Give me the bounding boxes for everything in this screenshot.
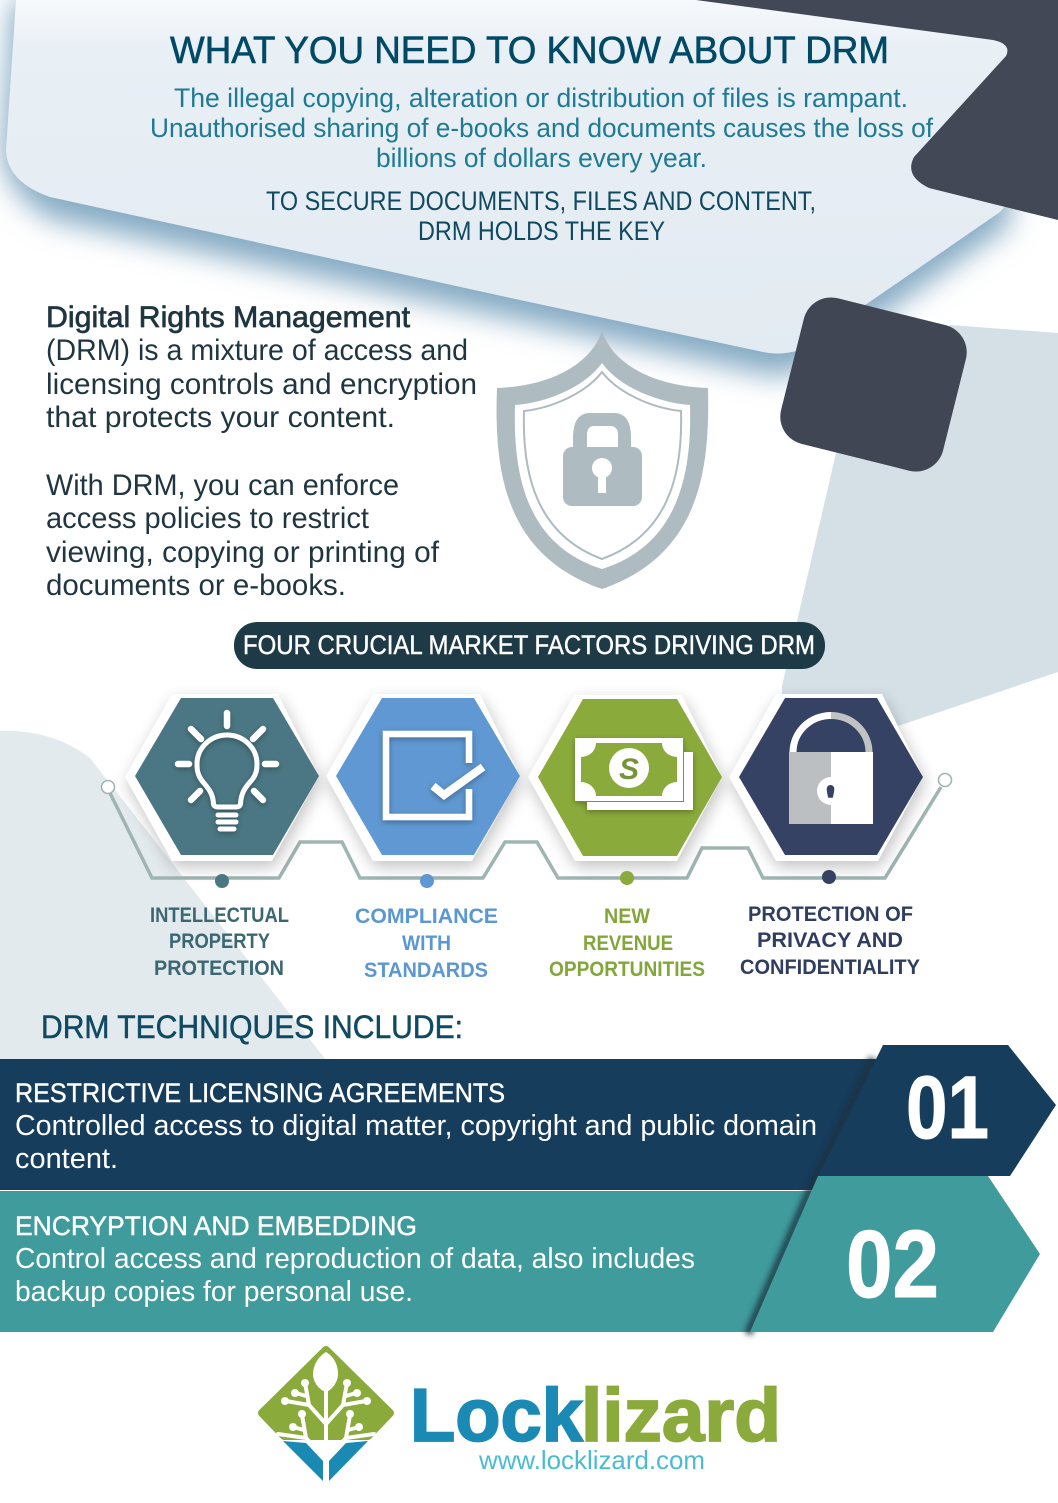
intro text: [150, 83, 933, 173]
logo mark: [262, 1350, 390, 1481]
technique 02 text: Control access and reproduction of data, also includes: [15, 1243, 695, 1275]
DRM definition text: viewing, copying or printing of: [46, 536, 440, 569]
header panel shadow: [2, 0, 1010, 376]
dot: [420, 874, 434, 888]
techniques heading: DRM TECHNIQUES INCLUDE:: [41, 1009, 463, 1045]
label: [355, 905, 498, 982]
header panel: [6, 0, 1058, 354]
technique 02 text: backup copies for personal use.: [15, 1276, 413, 1308]
dark corner shape: [696, 0, 1058, 220]
background shape: right pale panel: [782, 325, 1058, 765]
label: CONFIDENTIALITY: [740, 956, 920, 979]
key statement: DRM HOLDS THE KEY: [418, 216, 665, 246]
fold shadow: [748, 1058, 873, 1334]
technique 01 text: Controlled access to digital matter, copyright and public domain: [15, 1110, 817, 1142]
technique 01 text: [15, 1078, 817, 1175]
icon: banknotes: S: [619, 753, 639, 786]
technique 01 band: [0, 1059, 885, 1190]
factor 2: compliance: [326, 694, 522, 982]
key statement: [266, 186, 816, 246]
DRM definition text: Digital Rights Management: [46, 301, 411, 334]
DRM definition text: documents or e-books.: [46, 569, 346, 602]
factor 3: new revenue: [528, 695, 724, 981]
icon: shield with padlock: [497, 331, 708, 589]
arrow 01: 01: [906, 1057, 989, 1157]
intro text: billions of dollars every year.: [376, 143, 707, 173]
label: STANDARDS: [364, 959, 488, 982]
factors pill heading: FOUR CRUCIAL MARKET FACTORS DRIVING DRM: [243, 630, 815, 660]
label: WITH: [402, 932, 451, 955]
label: PROTECTION OF: [748, 903, 913, 926]
technique 02 text: [15, 1211, 695, 1308]
intro text: Unauthorised sharing of e-books and documents causes the loss of: [150, 113, 933, 143]
DRM definition text: access policies to restrict: [46, 502, 370, 535]
DRM definition text: that protects your content.: [46, 401, 395, 434]
arrow 01: [818, 1045, 1056, 1176]
intro text: The illegal copying, alteration or distribution of files is rampant.: [174, 83, 908, 113]
DRM definition text: With DRM, you can enforce: [46, 469, 399, 502]
icon: checkbox: [386, 734, 483, 817]
factor 4: privacy: [729, 694, 925, 979]
label: COMPLIANCE: [355, 905, 498, 928]
DRM definition text: licensing controls and encryption: [46, 368, 477, 401]
dark rotated square: [774, 292, 973, 477]
logo url: www.locklizard.com: [478, 1445, 705, 1475]
DRM definition text: [46, 301, 477, 602]
technique 01 text: content.: [15, 1143, 118, 1175]
factor 1: intellectual property: [125, 694, 321, 980]
technique 02 band: [0, 1191, 815, 1332]
label: PROPERTY: [169, 930, 270, 953]
label: [549, 905, 705, 981]
label: PRIVACY AND: [757, 929, 903, 952]
dot: [822, 870, 836, 884]
label: INTELLECTUAL: [150, 904, 289, 927]
arrow 02: [750, 1176, 1040, 1332]
logo: [262, 1350, 781, 1481]
technique 01 text: RESTRICTIVE LICENSING AGREEMENTS: [15, 1078, 505, 1108]
label: OPPORTUNITIES: [549, 958, 705, 981]
factors pill heading: [234, 622, 825, 669]
connector line: [102, 774, 952, 878]
label: NEW: [604, 905, 650, 928]
logo wordmark: Lock: [410, 1373, 583, 1457]
icon: light bulb: [178, 713, 276, 829]
dot: [215, 874, 229, 888]
title: WHAT YOU NEED TO KNOW ABOUT DRM: [170, 30, 889, 72]
logo wordmark: lizard: [581, 1373, 781, 1457]
key statement: TO SECURE DOCUMENTS, FILES AND CONTENT,: [266, 186, 816, 216]
icon: padlock: [789, 716, 873, 824]
technique 02 text: ENCRYPTION AND EMBEDDING: [15, 1211, 417, 1241]
DRM definition text: (DRM) is a mixture of access and: [46, 334, 468, 367]
icon: banknotes: [575, 738, 693, 810]
arrow 02: 02: [846, 1211, 939, 1318]
label: [150, 904, 289, 980]
label: [740, 903, 920, 979]
dot: [620, 871, 634, 885]
label: PROTECTION: [154, 957, 284, 980]
label: REVENUE: [583, 932, 673, 955]
background shape: left pale panel: [0, 731, 326, 1060]
